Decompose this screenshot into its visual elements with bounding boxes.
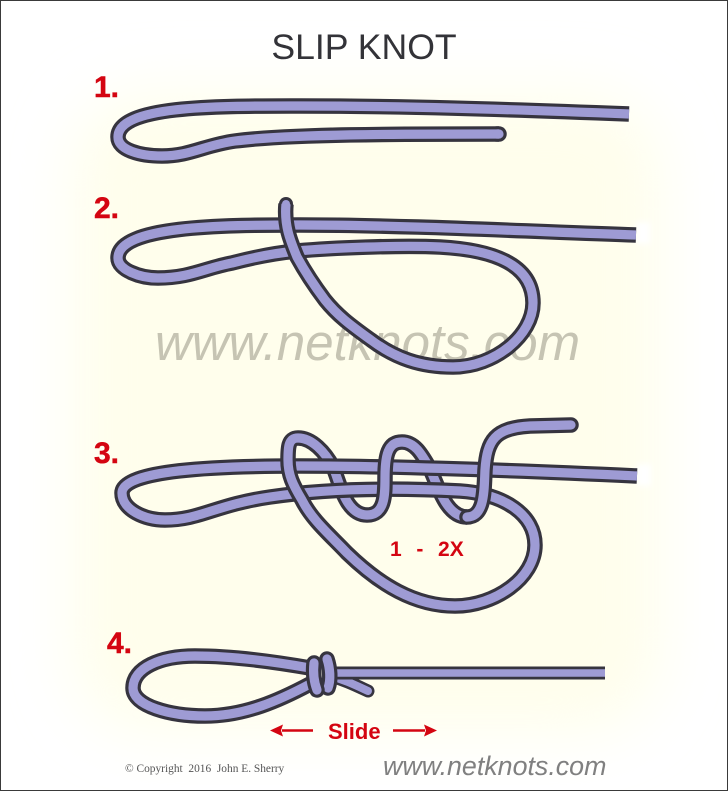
repeat count label: 1 - 2X (390, 538, 464, 561)
step 1 rope (118, 106, 629, 156)
step 3 rope (122, 425, 637, 606)
copyright: © Copyright 2016 John E. Sherry (125, 763, 285, 775)
watermark: www.netknots.com (155, 314, 580, 371)
step 2 tag end crossing over (286, 204, 453, 367)
right slide arrow (393, 724, 437, 736)
step 2 number: 2. (94, 192, 119, 225)
step 3 number: 3. (94, 437, 119, 470)
step 4 loop (133, 656, 310, 716)
left slide arrow (270, 724, 313, 736)
step 4 standing line (330, 666, 605, 680)
title: SLIP KNOT (271, 27, 457, 67)
step 2 rope (118, 204, 636, 367)
step 4 knot wraps (314, 659, 330, 690)
website url: www.netknots.com (383, 751, 606, 781)
slide label: Slide (328, 719, 381, 744)
step 4 tag end (330, 676, 368, 691)
step 3 wraps under the strands (298, 438, 467, 517)
step 2 main strand and big loop (118, 225, 636, 367)
step 4 number: 4. (107, 627, 132, 660)
step 3 main strand and big loop (122, 466, 637, 606)
step 4 finished knot (133, 656, 605, 716)
step 3 wraps over the strands (288, 425, 571, 606)
step 1 number: 1. (94, 71, 119, 104)
